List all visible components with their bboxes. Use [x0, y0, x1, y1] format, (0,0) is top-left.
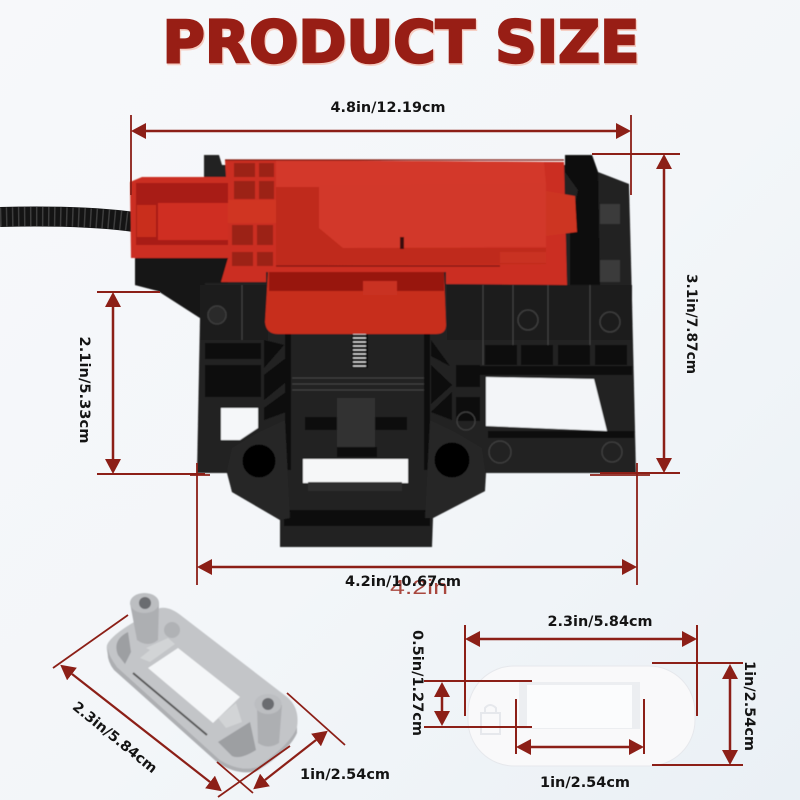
- dimension: top width 4.8in: [131, 100, 631, 195]
- left channel: [136, 183, 228, 245]
- dimension: bottom width 4.2in: 4.2in/10.67cm: [345, 574, 461, 590]
- icon: corrugated cable: [0, 217, 134, 222]
- housing ribs and recesses: [135, 258, 634, 526]
- title: PRODUCT SIZE: [164, 10, 640, 78]
- cover lower step: [276, 187, 546, 265]
- dimension: left height 2.1in: [76, 292, 205, 474]
- black housing: [135, 155, 636, 547]
- dimension: plate width 1in: 1in/2.54cm: [741, 661, 757, 751]
- dimension: gray part length 2.3in: [53, 615, 290, 797]
- dimension: plate slot height 0.5in: [409, 630, 532, 736]
- dimension: right height 3.1in: [592, 154, 699, 473]
- main product: door lock assembly: [130, 155, 636, 547]
- red cover: [130, 160, 577, 334]
- dimension: plate slot width 1in: 1in/2.54cm: [540, 775, 630, 791]
- dimension: left height 2.1in: 2.1in/5.33cm: [76, 336, 92, 444]
- small gray bracket part: [107, 593, 298, 772]
- lattice: [232, 163, 274, 266]
- cover upper panel: [276, 160, 546, 187]
- front tab: [265, 272, 446, 334]
- dimension: plate width 1in: [652, 661, 757, 765]
- dimension: plate slot width 1in: [516, 699, 644, 791]
- dimension: gray part width 1in: 1in/2.54cm: [300, 767, 390, 783]
- icon: small padlock: [481, 705, 500, 734]
- housing holes and windows: [221, 377, 607, 491]
- bracket window: [148, 648, 240, 723]
- dimension: bottom width 4.2in: [190, 463, 650, 599]
- mounting ears: [227, 420, 485, 520]
- small white plate part: [468, 666, 695, 766]
- dimension: gray part width 1in: [217, 693, 390, 793]
- dimension: bottom width 4.2in: 4.2in: [390, 577, 448, 599]
- right tab: [546, 191, 577, 236]
- spring: [353, 334, 366, 366]
- dimension: plate slot height 0.5in: 0.5in/1.27cm: [409, 630, 425, 736]
- peg: lower: [254, 694, 282, 746]
- dimension: plate length 2.3in: 2.3in/5.84cm: [548, 614, 652, 630]
- dimension: top width 4.8in: 4.8in/12.19cm: [330, 100, 446, 116]
- right column details: [565, 155, 600, 285]
- peg: upper: [130, 593, 159, 644]
- dimension: gray part length 2.3in: 2.3in/5.84cm: [69, 699, 160, 777]
- dimension: right height 3.1in: 3.1in/7.87cm: [683, 274, 699, 374]
- title: PRODUCT SIZE: [162, 8, 640, 76]
- cover main panel: [319, 184, 546, 248]
- dimension: plate length 2.3in: [465, 614, 697, 716]
